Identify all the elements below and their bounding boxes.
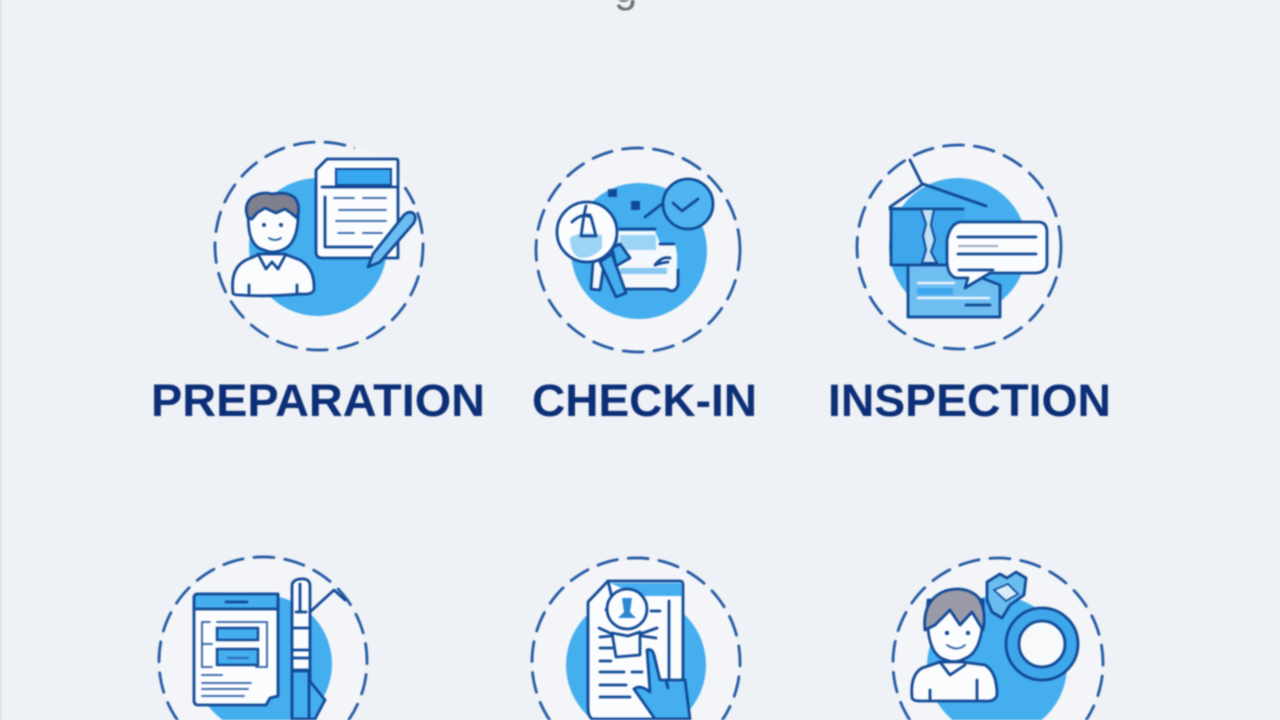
form bbox=[194, 594, 278, 705]
person bbox=[912, 589, 997, 701]
ribbon bbox=[591, 244, 630, 297]
panel: person with ring bbox=[893, 558, 1103, 720]
medal and emblem bbox=[599, 589, 657, 657]
envelope bbox=[908, 265, 1000, 317]
label: check-in: CHECK-IN bbox=[532, 375, 757, 426]
hanging sign bbox=[890, 160, 986, 265]
check mark bbox=[645, 179, 713, 229]
small device bbox=[987, 572, 1026, 618]
hand bbox=[634, 650, 690, 719]
panel: preparation bbox=[151, 142, 485, 426]
document bbox=[316, 159, 398, 258]
label: preparation: PREPARATION bbox=[151, 375, 485, 426]
icon: check-in bbox=[536, 148, 740, 352]
label: inspection: INSPECTION bbox=[828, 375, 1111, 426]
panel: document review bbox=[532, 558, 740, 720]
magnifier bbox=[557, 202, 617, 262]
car bbox=[618, 229, 678, 291]
ring bbox=[1006, 608, 1078, 680]
speech bubble bbox=[947, 222, 1047, 288]
icon: document review bbox=[532, 558, 740, 720]
icon: person with ring bbox=[893, 558, 1103, 720]
squares bbox=[608, 189, 640, 210]
pen bbox=[368, 212, 415, 267]
panel: check-in bbox=[532, 148, 757, 426]
person bbox=[233, 193, 314, 296]
document bbox=[588, 581, 683, 719]
icon: preparation bbox=[215, 142, 423, 350]
icon: inspection bbox=[857, 145, 1061, 349]
panel: inspection bbox=[828, 145, 1111, 426]
icon: form and pen bbox=[159, 557, 367, 720]
pen bbox=[292, 579, 345, 720]
panel: form and pen bbox=[159, 557, 367, 720]
